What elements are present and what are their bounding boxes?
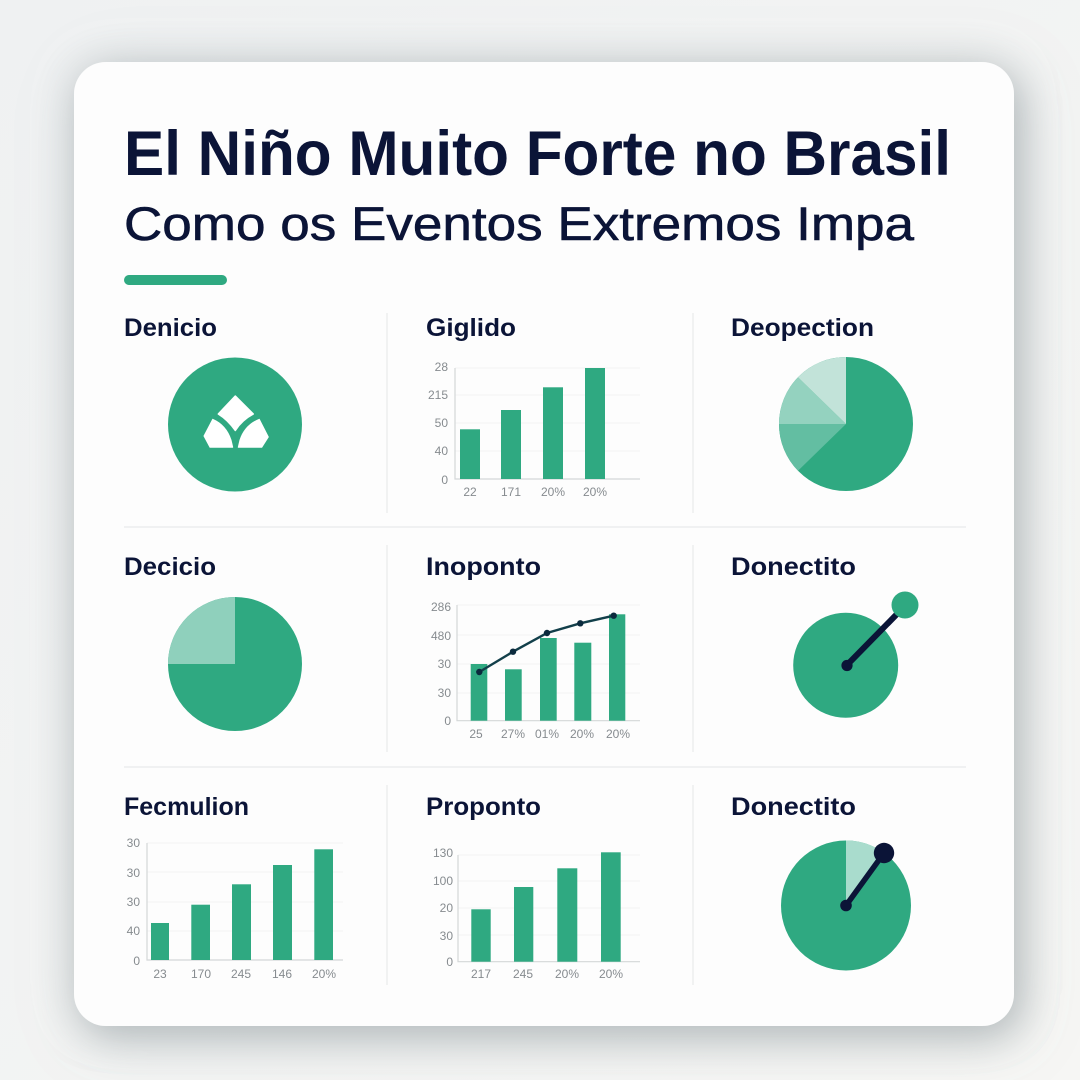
heading: Decicio: Decicio — [124, 553, 216, 581]
heading: Donectito: Donectito — [731, 553, 856, 581]
bar chart: Fecmulion: 146 — [272, 967, 292, 981]
bar chart: Proponto: 20% — [555, 967, 579, 981]
panel: Fecmulion — [124, 793, 343, 981]
combo chart: bars and line: 20% — [570, 727, 594, 741]
panel: Donectito middle — [731, 553, 918, 718]
icon: leaf badge — [168, 358, 302, 492]
panel: Giglido — [426, 314, 640, 499]
bar chart: Fecmulion: 40 — [127, 924, 140, 938]
gauge pie with navy knob — [781, 840, 911, 970]
combo chart: bars and line: 25 — [469, 727, 483, 741]
bar chart: Fecmulion — [127, 836, 343, 981]
bar chart: Giglido: 40 — [435, 444, 448, 458]
bar chart: Giglido: 20% — [541, 485, 565, 499]
combo chart: bars and line: 286 — [431, 600, 451, 614]
pie chart: quarter highlight — [168, 597, 302, 731]
bar chart: Giglido: 50 — [435, 416, 448, 430]
pie chart: four slices — [779, 357, 913, 491]
panel: Decicio — [124, 553, 302, 731]
bar chart: Fecmulion: 30 — [127, 836, 140, 850]
heading: Denicio: Denicio — [124, 314, 217, 342]
bar chart: Proponto: 245 — [513, 967, 533, 981]
panel: Inoponto — [426, 553, 640, 741]
combo chart: bars and line: 30 — [438, 686, 451, 700]
bar chart: Proponto: 30 — [440, 929, 453, 943]
bar chart: Proponto: 130 — [433, 846, 453, 860]
combo chart: bars and line: 0 — [444, 714, 451, 728]
panel: Donectito bottom — [731, 793, 911, 970]
heading: Donectito: Donectito — [731, 793, 856, 821]
bar chart: Proponto: 20% — [599, 967, 623, 981]
combo chart: bars and line: 27% — [501, 727, 525, 741]
bar chart: Fecmulion: 30 — [127, 866, 140, 880]
panel: Proponto — [426, 793, 640, 981]
title: El Niño Muito Forte no Brasil — [124, 119, 951, 189]
combo chart: bars and line — [431, 600, 640, 741]
bar chart: Fecmulion: 30 — [127, 895, 140, 909]
bar chart: Giglido: 22 — [463, 485, 477, 499]
bar chart: Giglido: 20% — [583, 485, 607, 499]
bar chart: Proponto: 20 — [440, 901, 453, 915]
bar chart: Giglido: 0 — [441, 473, 448, 487]
combo chart: bars and line: 30 — [438, 657, 451, 671]
bar chart: Fecmulion: 0 — [133, 954, 140, 968]
heading: Fecmulion: Fecmulion — [124, 793, 249, 821]
bar chart: Giglido — [428, 360, 640, 499]
bar chart: Fecmulion: 23 — [153, 967, 167, 981]
bar chart: Giglido: 215 — [428, 388, 448, 402]
accent bar — [124, 275, 227, 285]
heading: Inoponto: Inoponto — [426, 553, 541, 581]
bar chart: Giglido: 28 — [435, 360, 448, 374]
bar chart: Giglido: 171 — [501, 485, 521, 499]
bar chart: Fecmulion: 245 — [231, 967, 251, 981]
bar chart: Proponto — [433, 846, 640, 981]
panel: Denicio — [124, 314, 302, 492]
combo chart: bars and line: 01% — [535, 727, 559, 741]
gauge dial with green knob — [793, 592, 918, 718]
combo chart: bars and line: 20% — [606, 727, 630, 741]
combo chart: bars and line: 480 — [431, 629, 451, 643]
heading: Giglido: Giglido — [426, 314, 516, 342]
heading: Deopection: Deopection — [731, 314, 874, 342]
bar chart: Fecmulion: 20% — [312, 967, 336, 981]
panel: main card — [74, 62, 1014, 1026]
panel: Deopection — [731, 314, 913, 491]
heading: Proponto: Proponto — [426, 793, 541, 821]
subtitle: Como os Eventos Extremos Impa — [124, 197, 915, 250]
bar chart: Proponto: 100 — [433, 874, 453, 888]
bar chart: Proponto: 0 — [446, 955, 453, 969]
bar chart: Proponto: 217 — [471, 967, 491, 981]
bar chart: Fecmulion: 170 — [191, 967, 211, 981]
